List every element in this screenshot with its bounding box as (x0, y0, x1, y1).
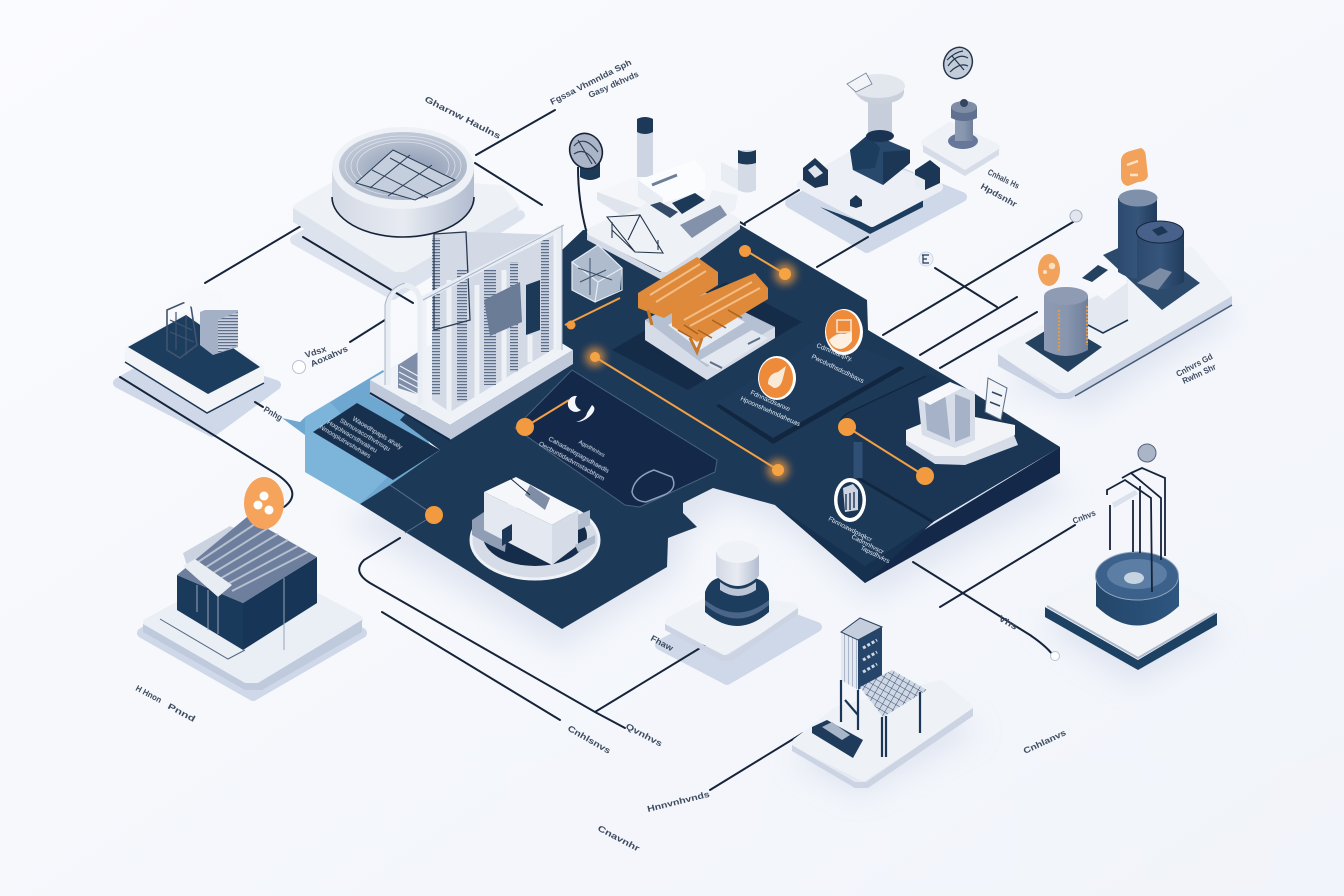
panel: blue side text card: Waoedhpapls ahaly (351, 416, 404, 451)
label: right of pedestal second line: Hpdsnhr (979, 181, 1020, 210)
label: top centre: Fgssa Vhmnlda Sph (548, 57, 633, 107)
orange connector (525, 400, 569, 427)
label: bottom: Cnavnhr (596, 823, 642, 854)
module: bottom scaffold tower (792, 618, 973, 788)
panel: middle text card: Cdmndanpry. (815, 342, 854, 363)
module: small octagonal plinth unit (906, 378, 1018, 465)
panel: middle text card: Hpoonshwhmdaheuas (739, 395, 802, 428)
tank with dark base (1025, 287, 1102, 372)
module: right twin tank platform (998, 190, 1232, 399)
platform side face (865, 447, 1060, 583)
label: drum lower: Vhs (997, 613, 1020, 632)
icon: orange badge right lower (1038, 254, 1060, 286)
panel: orange machine card (612, 282, 802, 390)
label: drum: Cnhvs (1071, 508, 1097, 526)
label: bottom scaffold: Hnnvnhvnds (646, 789, 711, 814)
label: left node: Vdsx (304, 344, 328, 360)
small node icons (292, 210, 1082, 660)
icon: small vehicle outline (632, 470, 674, 502)
frame rods (388, 226, 562, 405)
label: storage: H Hnon (134, 683, 163, 705)
panel: middle text card: Fdnnacdsanxe (749, 389, 791, 413)
icon: orange badge upper (825, 309, 863, 355)
module: top pedestal (802, 73, 940, 234)
blue section of platform (282, 370, 440, 504)
machine (200, 310, 238, 355)
label: left node second line: Aoxahvs (309, 343, 350, 369)
module: bottom centre capped unit (665, 541, 798, 661)
module: small cage unit (572, 245, 622, 302)
platform top face (360, 222, 1060, 629)
panel: central text card: Agpdhtnhxs (577, 440, 606, 459)
panel: lower right text block (827, 478, 891, 565)
orange connector lines and dots (390, 245, 934, 533)
label: capped unit: Fhaw (649, 633, 675, 653)
icon: white ring badge (834, 478, 866, 522)
panel: central navy platform (282, 222, 1060, 629)
module: tower column frame (370, 225, 573, 440)
underplates: flat pale plates below modules (118, 160, 962, 696)
label: lower line second: Qvnhvs (624, 721, 664, 749)
panel: blue side text card: Nmoopiulrwshvhaes (318, 424, 372, 460)
module: ring reactor (293, 127, 518, 284)
panel: lower right text block: Tapsdhvkrs (859, 545, 891, 565)
soft shadows beneath platforms (345, 290, 1240, 795)
label: right of pedestal: Cnhals Hs (986, 167, 1021, 191)
panel: middle text card: Pwcdvdhsdcdhbaxs (810, 354, 866, 385)
panel: central text card: Cahadanlepagsdhaedls (547, 436, 611, 475)
module: ribbed storage block (143, 477, 362, 690)
stepped right section (840, 374, 1060, 522)
icon: white swirl (568, 396, 594, 422)
label: lower line: Cnhlsnvs (566, 723, 613, 756)
panel: blue side text card (313, 403, 440, 480)
label: bottom right: Cnhlanvs (1022, 727, 1068, 756)
box unit (1088, 280, 1128, 333)
label: right tanks second line: Rwhn Shr (1181, 361, 1218, 386)
label: top centre second line: Gasy dkhvds (587, 69, 640, 100)
icon: orange badge right upper (1121, 148, 1148, 186)
panel: lower right text block: Fbnnoawdpsqkcr (827, 516, 873, 544)
module: top right small unit (923, 99, 999, 176)
panel: middle text card (716, 309, 905, 444)
panel: blue side text card: Sbrnuvaccrthvtnsqu (338, 417, 391, 453)
label: left platform: Pnhg (262, 404, 284, 423)
panel: central text card: Oecbuntidadvrnstacbhpm (537, 441, 606, 483)
label: right tanks: Cnhvrs Gd (1174, 351, 1214, 379)
label: storage second: Pnnd (166, 701, 197, 724)
module: left dark platform unit (125, 285, 264, 413)
module: orange gantry machine (638, 257, 775, 380)
icon: orange badge (244, 477, 284, 529)
icon: orange badge lower (758, 356, 796, 400)
icon: round disc top right (939, 43, 977, 83)
columns (432, 232, 560, 412)
panel: blue side text card: Hoqolwacrsthvalreu (326, 419, 378, 455)
rear base (1103, 238, 1200, 310)
module: right drum tower (1045, 444, 1217, 670)
module: upper press machine (587, 117, 756, 279)
icon: hanging disc (564, 128, 608, 230)
labels (134, 57, 1218, 854)
panel: central text card (515, 370, 717, 507)
panel: lower right text block: Cadmnhvscr (850, 534, 885, 556)
module: motor drum unit (471, 477, 599, 579)
label: top left: Gharnw Haulns (423, 94, 503, 141)
connector lines (120, 110, 1075, 790)
lower band (775, 505, 933, 583)
